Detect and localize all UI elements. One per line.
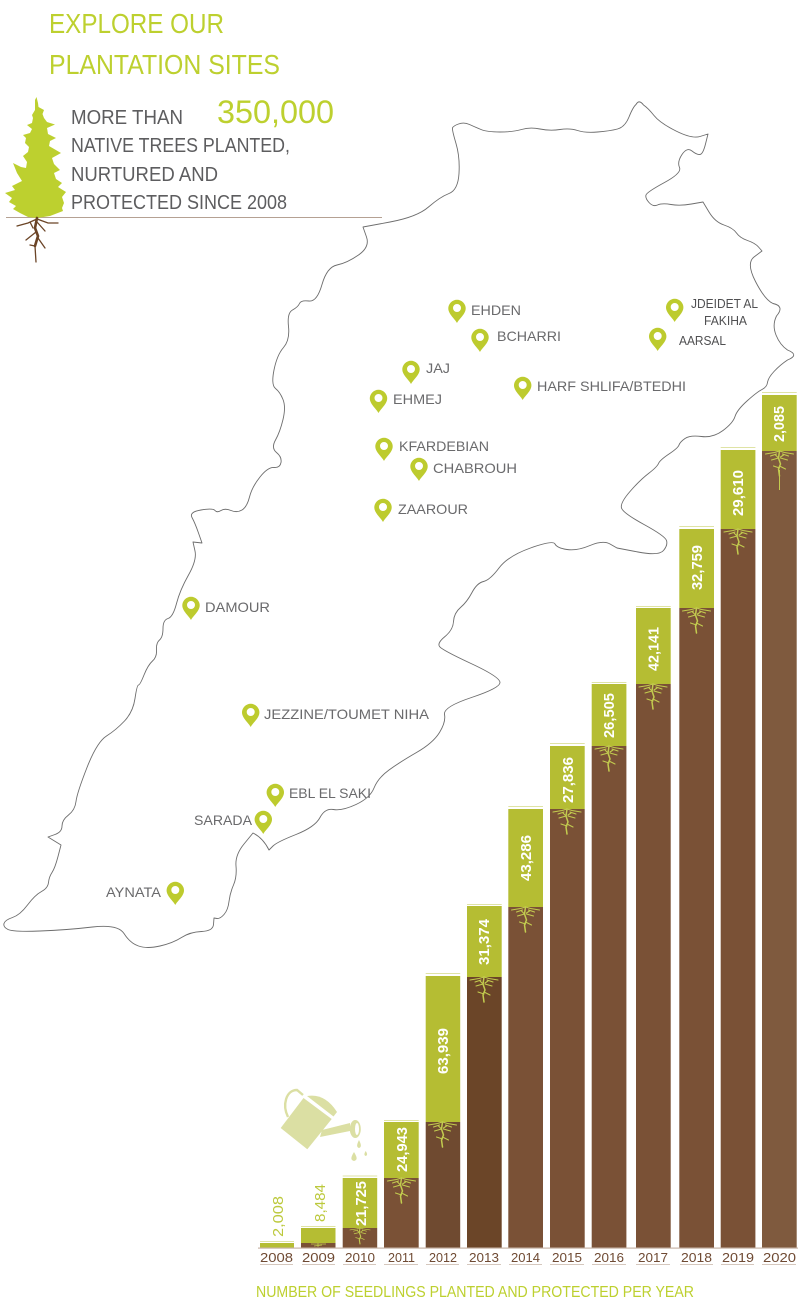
bar 2009 bbox=[301, 1184, 336, 1248]
bar 2009: 8,484 bbox=[312, 1184, 329, 1222]
pin: Ehmej: EHMEJ bbox=[393, 391, 442, 407]
year axis labels: 2019 bbox=[722, 1250, 754, 1265]
bar 2012 bbox=[426, 973, 460, 1248]
title bbox=[49, 8, 280, 80]
pin: Ehden bbox=[448, 300, 521, 323]
pin: Ehmej bbox=[370, 390, 442, 413]
pin: Jdeidet Al Fakiha: FAKIHA bbox=[704, 313, 747, 328]
intro text block: NATIVE TREES PLANTED, bbox=[71, 135, 290, 157]
pin: Zaarour bbox=[374, 499, 468, 522]
intro text block bbox=[71, 107, 290, 214]
pin: Ebl El Saki: EBL EL SAKI bbox=[289, 785, 371, 801]
bar 2011 bbox=[384, 1120, 419, 1248]
pin: Sarada: SARADA bbox=[194, 812, 253, 828]
pin: Aynata: AYNATA bbox=[106, 884, 162, 900]
bar 2019 bbox=[721, 447, 755, 1248]
bar 2013: 31,374 bbox=[476, 918, 493, 965]
bar 2014 bbox=[508, 806, 543, 1248]
pin: Bcharri bbox=[471, 328, 561, 352]
year axis labels: 2020 bbox=[763, 1250, 796, 1265]
bar 2014: 43,286 bbox=[518, 835, 535, 881]
bar 2018: 32,759 bbox=[689, 545, 706, 590]
pin: Jaj bbox=[402, 360, 450, 384]
year axis labels: 2011 bbox=[388, 1250, 415, 1265]
pin: Bcharri: BCHARRI bbox=[497, 328, 561, 344]
headline number: 350,000 bbox=[217, 94, 334, 130]
bar chart: seedlings per year bbox=[258, 392, 798, 1249]
pin: Jdeidet Al Fakiha bbox=[666, 296, 758, 328]
year axis labels: 2012 bbox=[429, 1250, 457, 1265]
bar 2020: 2,085 bbox=[771, 406, 788, 442]
pin: Aynata bbox=[106, 882, 184, 905]
bar 2013 bbox=[467, 904, 502, 1248]
pin: Jezzine/Toumet Niha: JEZZINE/TOUMET NIHA bbox=[264, 706, 430, 722]
pin: Chabrouh bbox=[410, 458, 517, 481]
bar 2011: 24,943 bbox=[394, 1127, 411, 1172]
bar 2016: 26,505 bbox=[601, 693, 618, 738]
pin: Zaarour: ZAAROUR bbox=[398, 501, 468, 517]
bar 2019: 29,610 bbox=[730, 470, 747, 516]
year axis labels: 2010 bbox=[345, 1250, 375, 1265]
pin: Damour: DAMOUR bbox=[205, 599, 270, 615]
bar 2020 bbox=[762, 392, 797, 1248]
icon: watering can bbox=[281, 1090, 367, 1161]
intro text block: NURTURED AND bbox=[71, 164, 218, 186]
bar 2015 bbox=[550, 743, 585, 1248]
pin: Kfardebian: KFARDEBIAN bbox=[399, 438, 489, 454]
pin: Ehden: EHDEN bbox=[471, 302, 521, 318]
pin: Aarsal bbox=[649, 328, 726, 351]
bar 2008: 2,008 bbox=[270, 1196, 287, 1237]
pin: Jaj: JAJ bbox=[426, 360, 450, 376]
title: PLANTATION SITES bbox=[49, 49, 280, 80]
bar 2016 bbox=[592, 682, 626, 1248]
year axis labels: 2013 bbox=[469, 1250, 499, 1265]
pin: Sarada bbox=[194, 811, 272, 834]
title: EXPLORE OUR bbox=[49, 8, 224, 39]
intro text block: MORE THAN bbox=[71, 107, 183, 129]
year axis labels: 2009 bbox=[302, 1250, 335, 1265]
year axis labels: 2016 bbox=[594, 1250, 624, 1265]
pin: Damour bbox=[182, 597, 270, 620]
pin: Aarsal: AARSAL bbox=[679, 333, 726, 348]
chart caption: NUMBER OF SEEDLINGS PLANTED AND PROTECTED PER YEAR bbox=[256, 1284, 694, 1301]
year axis labels: 2014 bbox=[511, 1250, 540, 1265]
bar 2017: 42,141 bbox=[646, 627, 662, 671]
bar 2008 bbox=[260, 1196, 294, 1248]
ground line bbox=[6, 217, 382, 218]
pin: Jdeidet Al Fakiha: JDEIDET AL bbox=[691, 296, 758, 311]
pin: Harf Shlifa/Btedhi: HARF SHLIFA/BTEDHI bbox=[537, 378, 686, 394]
year axis labels: 2015 bbox=[552, 1250, 582, 1265]
year axis labels: 2018 bbox=[681, 1250, 712, 1265]
bar 2015: 27,836 bbox=[560, 757, 577, 803]
pin: Harf Shlifa/Btedhi bbox=[514, 377, 686, 400]
bar 2018 bbox=[679, 526, 714, 1248]
bar 2010 bbox=[343, 1176, 377, 1248]
year axis labels bbox=[260, 1250, 796, 1265]
bar 2012: 63,939 bbox=[435, 1028, 452, 1074]
pin: Chabrouh: CHABROUH bbox=[433, 460, 517, 476]
year axis labels: 2008 bbox=[260, 1250, 293, 1265]
map outline of Lebanon bbox=[4, 102, 794, 948]
year axis labels: 2017 bbox=[638, 1250, 668, 1265]
bar 2010: 21,725 bbox=[353, 1181, 370, 1226]
intro text block: PROTECTED SINCE 2008 bbox=[71, 192, 287, 214]
pin: Ebl El Saki bbox=[267, 784, 371, 807]
pin: Jezzine/Toumet Niha bbox=[242, 704, 430, 727]
icon: tree with roots bbox=[5, 97, 66, 262]
pin: Kfardebian bbox=[375, 438, 489, 461]
bar 2017 bbox=[636, 606, 671, 1248]
